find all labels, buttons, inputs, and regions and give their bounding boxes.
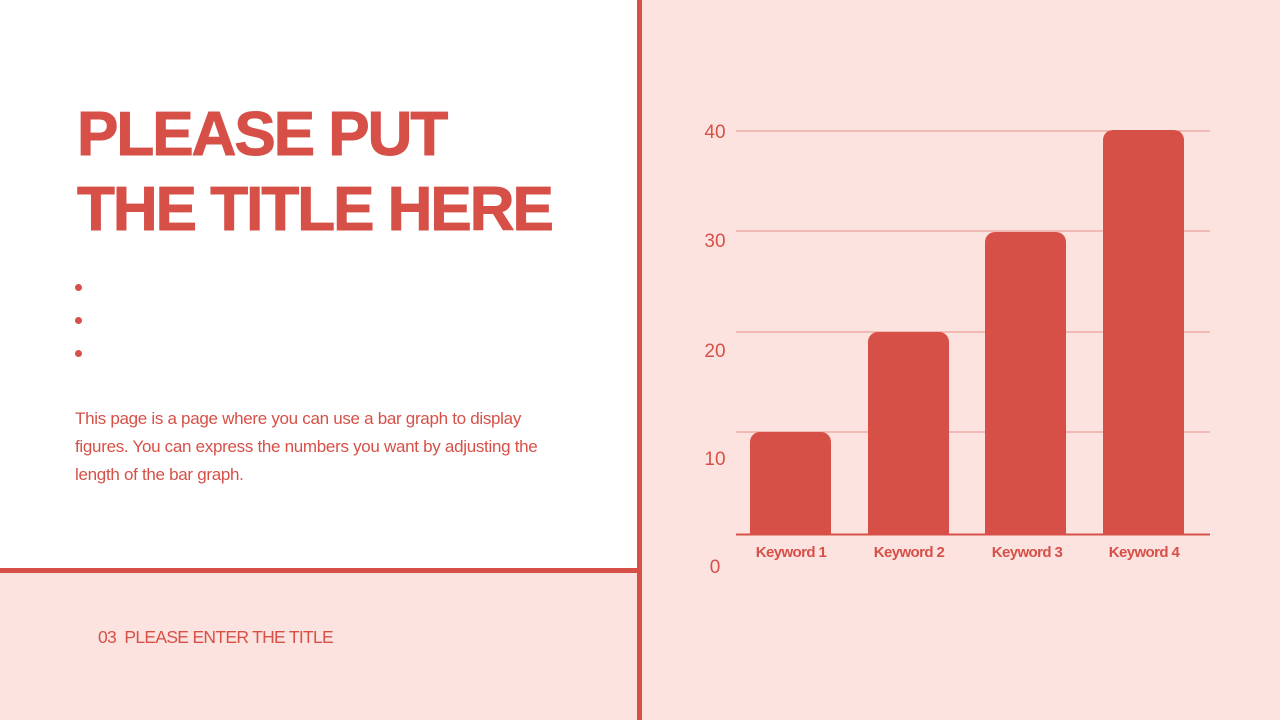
bar chart: 0 (710, 557, 720, 578)
title (77, 100, 552, 244)
panel: left white (0, 0, 638, 569)
bar chart: Keyword 1 (756, 544, 826, 561)
body text: This page is a page where you can use a bar graph to display figures. You can express the numbers you want by adjusting the length of the bar graph. (75, 409, 537, 484)
title: PLEASE PUT (77, 100, 446, 169)
bar chart: 10 (704, 449, 726, 470)
bar chart: 30 (704, 231, 726, 252)
bar chart: 20 (704, 341, 726, 362)
bar chart: Keyword 2 (874, 544, 944, 561)
title: THE TITLE HERE (77, 175, 552, 244)
bullets (75, 284, 82, 357)
footer title: 03 PLEASE ENTER THE TITLE (98, 627, 333, 647)
horizontal divider (0, 568, 638, 573)
bar chart: Keyword 4 (1109, 544, 1180, 561)
vertical divider (637, 0, 642, 720)
bar chart (704, 122, 1210, 578)
bar chart: 40 (704, 122, 726, 143)
bar chart: Keyword 3 (992, 544, 1062, 561)
